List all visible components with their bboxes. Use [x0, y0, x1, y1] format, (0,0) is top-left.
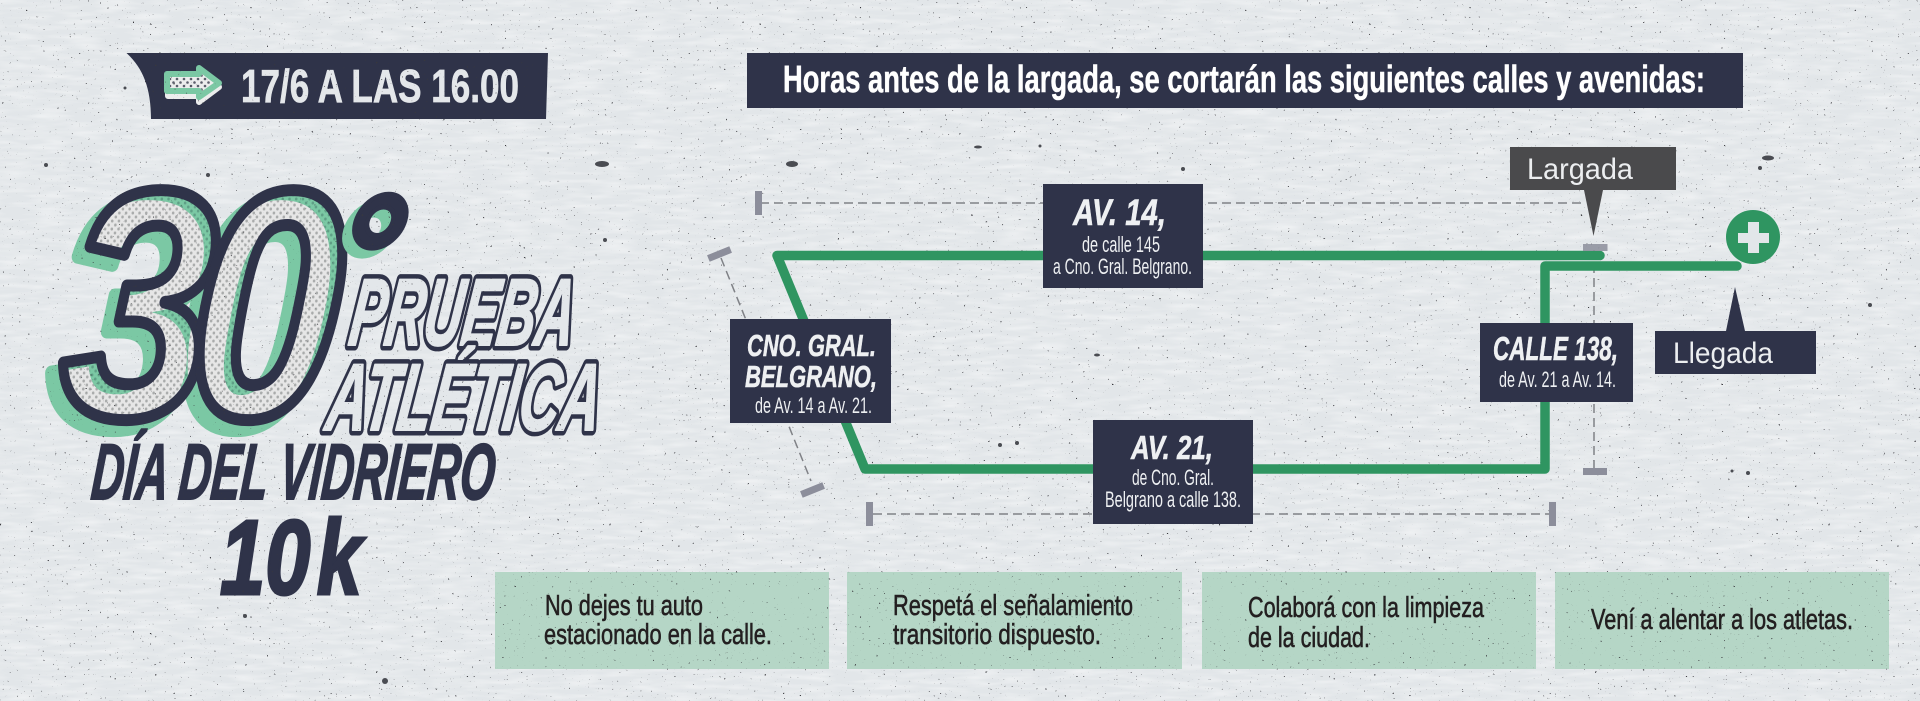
street label: Cno. Gral. Belgrano: BELGRANO, [745, 359, 877, 394]
title: Prueba Atlética (outlined): ATLÉTICA [320, 345, 609, 451]
street label: Cno. Gral. Belgrano: CNO. GRAL. [747, 328, 876, 363]
title: Prueba Atlética (outlined) [320, 260, 609, 451]
big title number 30 with degree: 30 [54, 123, 352, 486]
title: Prueba Atlética (outlined): ATLÉTICA [320, 345, 609, 451]
advice box 2: transitorio dispuesto. [893, 619, 1101, 651]
subtitle: Día del Vidriero: DÍA DEL VIDRIERO [89, 427, 499, 516]
street label: Calle 138: CALLE 138, [1493, 330, 1618, 367]
advice box 3 [1202, 572, 1536, 669]
event date banner [126, 53, 548, 119]
big title number 30 with degree: 30 [42, 133, 340, 496]
big title number 30 with degree: 30 [42, 133, 340, 496]
street label: Av. 14 [1043, 184, 1203, 288]
advice box 4 [1555, 572, 1889, 669]
title: Prueba Atlética (outlined): PRUEBA [344, 260, 583, 366]
street label: Cno. Gral. Belgrano [730, 319, 891, 423]
distance: 10 k: 10 k [220, 499, 366, 617]
callout: Llegada [1655, 287, 1816, 374]
street label: Av. 21: Belgrano a calle 138. [1105, 487, 1241, 512]
heading bar: street closures [747, 53, 1743, 108]
street label: Av. 21: de Cno. Gral. [1132, 465, 1214, 490]
advice box 3: Colaborá con la limpieza [1248, 592, 1485, 624]
advice box 3: de la ciudad. [1248, 622, 1370, 654]
icon: finish medical cross [1726, 210, 1780, 264]
advice box 1: No dejes tu auto [545, 590, 703, 622]
advice box 1: estacionado en la calle. [544, 619, 772, 651]
callout: Largada: Largada [1527, 153, 1633, 186]
big title number 30 with degree [45, 184, 409, 438]
big title number 30 with degree: ° [293, 167, 413, 362]
street label: Cno. Gral. Belgrano: de Av. 14 a Av. 21. [755, 393, 872, 418]
big title number 30 with degree: 30 [54, 123, 352, 486]
callout: Largada [1510, 147, 1676, 236]
date text: 17/6 A LAS 16.00 [241, 60, 519, 112]
title: Prueba Atlética (outlined): PRUEBA [344, 260, 583, 366]
advice box 2 [847, 572, 1182, 669]
street label: Calle 138: de Av. 21 a Av. 14. [1499, 367, 1616, 392]
street label: Av. 14: a Cno. Gral. Belgrano. [1053, 254, 1192, 279]
street label: Av. 14: AV. 14, [1072, 192, 1166, 233]
big title number 30 with degree: ° [303, 159, 423, 354]
street label: Av. 14: de calle 145 [1082, 232, 1160, 257]
panel: advice boxes [495, 572, 1889, 669]
advice box 1 [495, 572, 829, 669]
street label: Av. 21 [1093, 420, 1253, 524]
icon: dotted arrow [167, 68, 219, 102]
start marker tick [1583, 244, 1608, 251]
advice box 2: Respetá el señalamiento [893, 590, 1133, 622]
route line [777, 256, 1737, 469]
street label: Calle 138 [1480, 323, 1633, 402]
callout: Llegada: Llegada [1673, 337, 1773, 370]
route measure lines [707, 191, 1607, 526]
street label: Av. 21: AV. 21, [1130, 429, 1213, 466]
